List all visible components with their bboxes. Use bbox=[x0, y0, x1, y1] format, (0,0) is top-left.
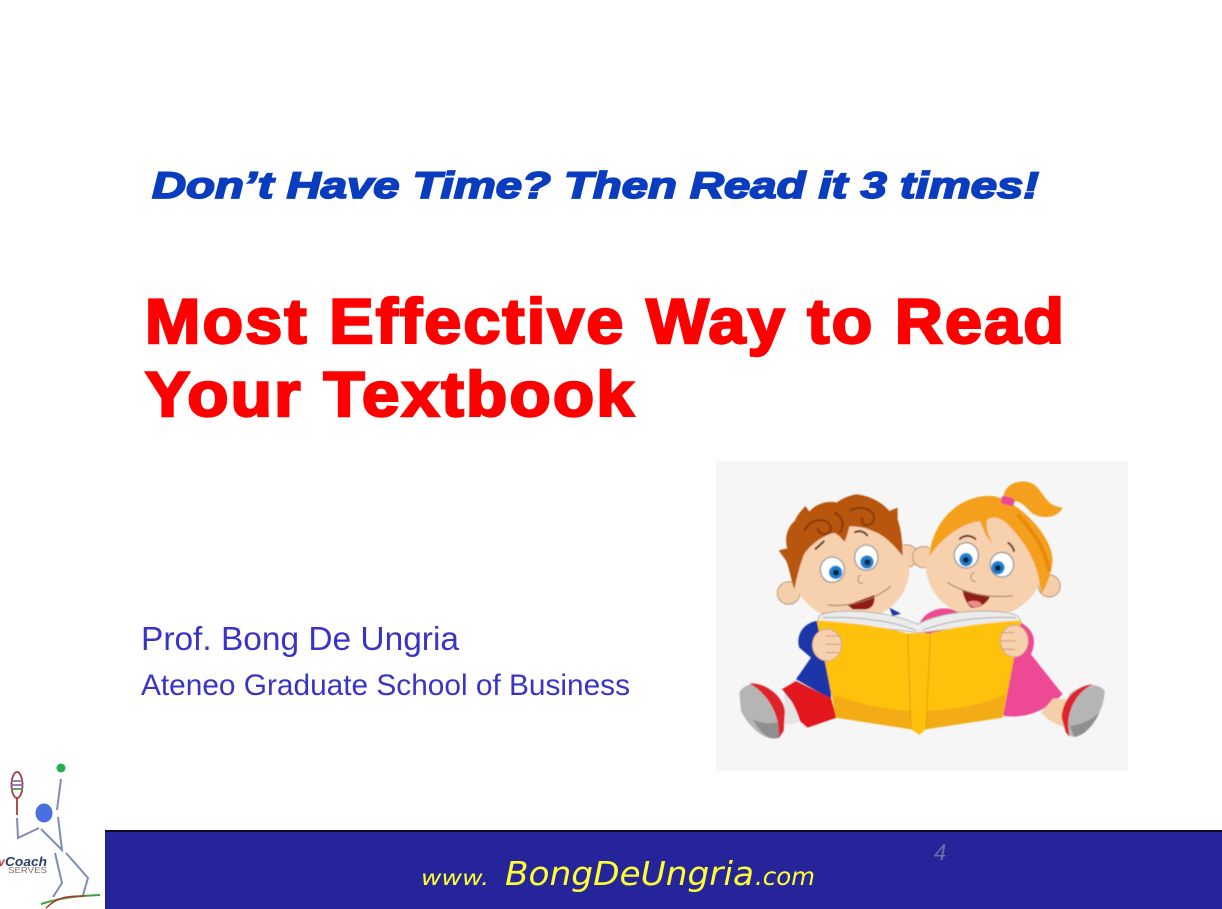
main title: Most Effective Way to Read bbox=[145, 287, 1066, 357]
website url: BongDeUngria bbox=[505, 854, 754, 893]
racket bbox=[11, 772, 23, 815]
logo text: Coach bbox=[5, 854, 47, 869]
main title: Your Textbook bbox=[145, 360, 636, 430]
player figure bbox=[17, 779, 88, 897]
footer band bbox=[105, 831, 1222, 909]
illustration: two children reading a book bbox=[716, 461, 1128, 771]
ground stroke bbox=[41, 895, 100, 904]
girl bbox=[913, 481, 1105, 737]
page number: 4 bbox=[934, 840, 946, 865]
ball bbox=[56, 764, 66, 772]
logo: vCoach Serves bbox=[0, 764, 100, 908]
author block bbox=[141, 620, 630, 702]
boy bbox=[739, 494, 918, 739]
website url: .com bbox=[755, 862, 815, 891]
author block: Ateneo Graduate School of Business bbox=[141, 669, 630, 702]
logo text bbox=[0, 854, 47, 875]
author block: Prof. Bong De Ungria bbox=[141, 620, 460, 657]
website url: www. bbox=[421, 866, 489, 890]
tagline heading: Don’t Have Time? Then Read it 3 times! bbox=[152, 165, 1039, 206]
player head bbox=[36, 804, 52, 822]
website url bbox=[421, 854, 815, 893]
book bbox=[812, 611, 1028, 735]
logo text: SERVES bbox=[8, 866, 47, 875]
main title bbox=[145, 287, 1066, 430]
